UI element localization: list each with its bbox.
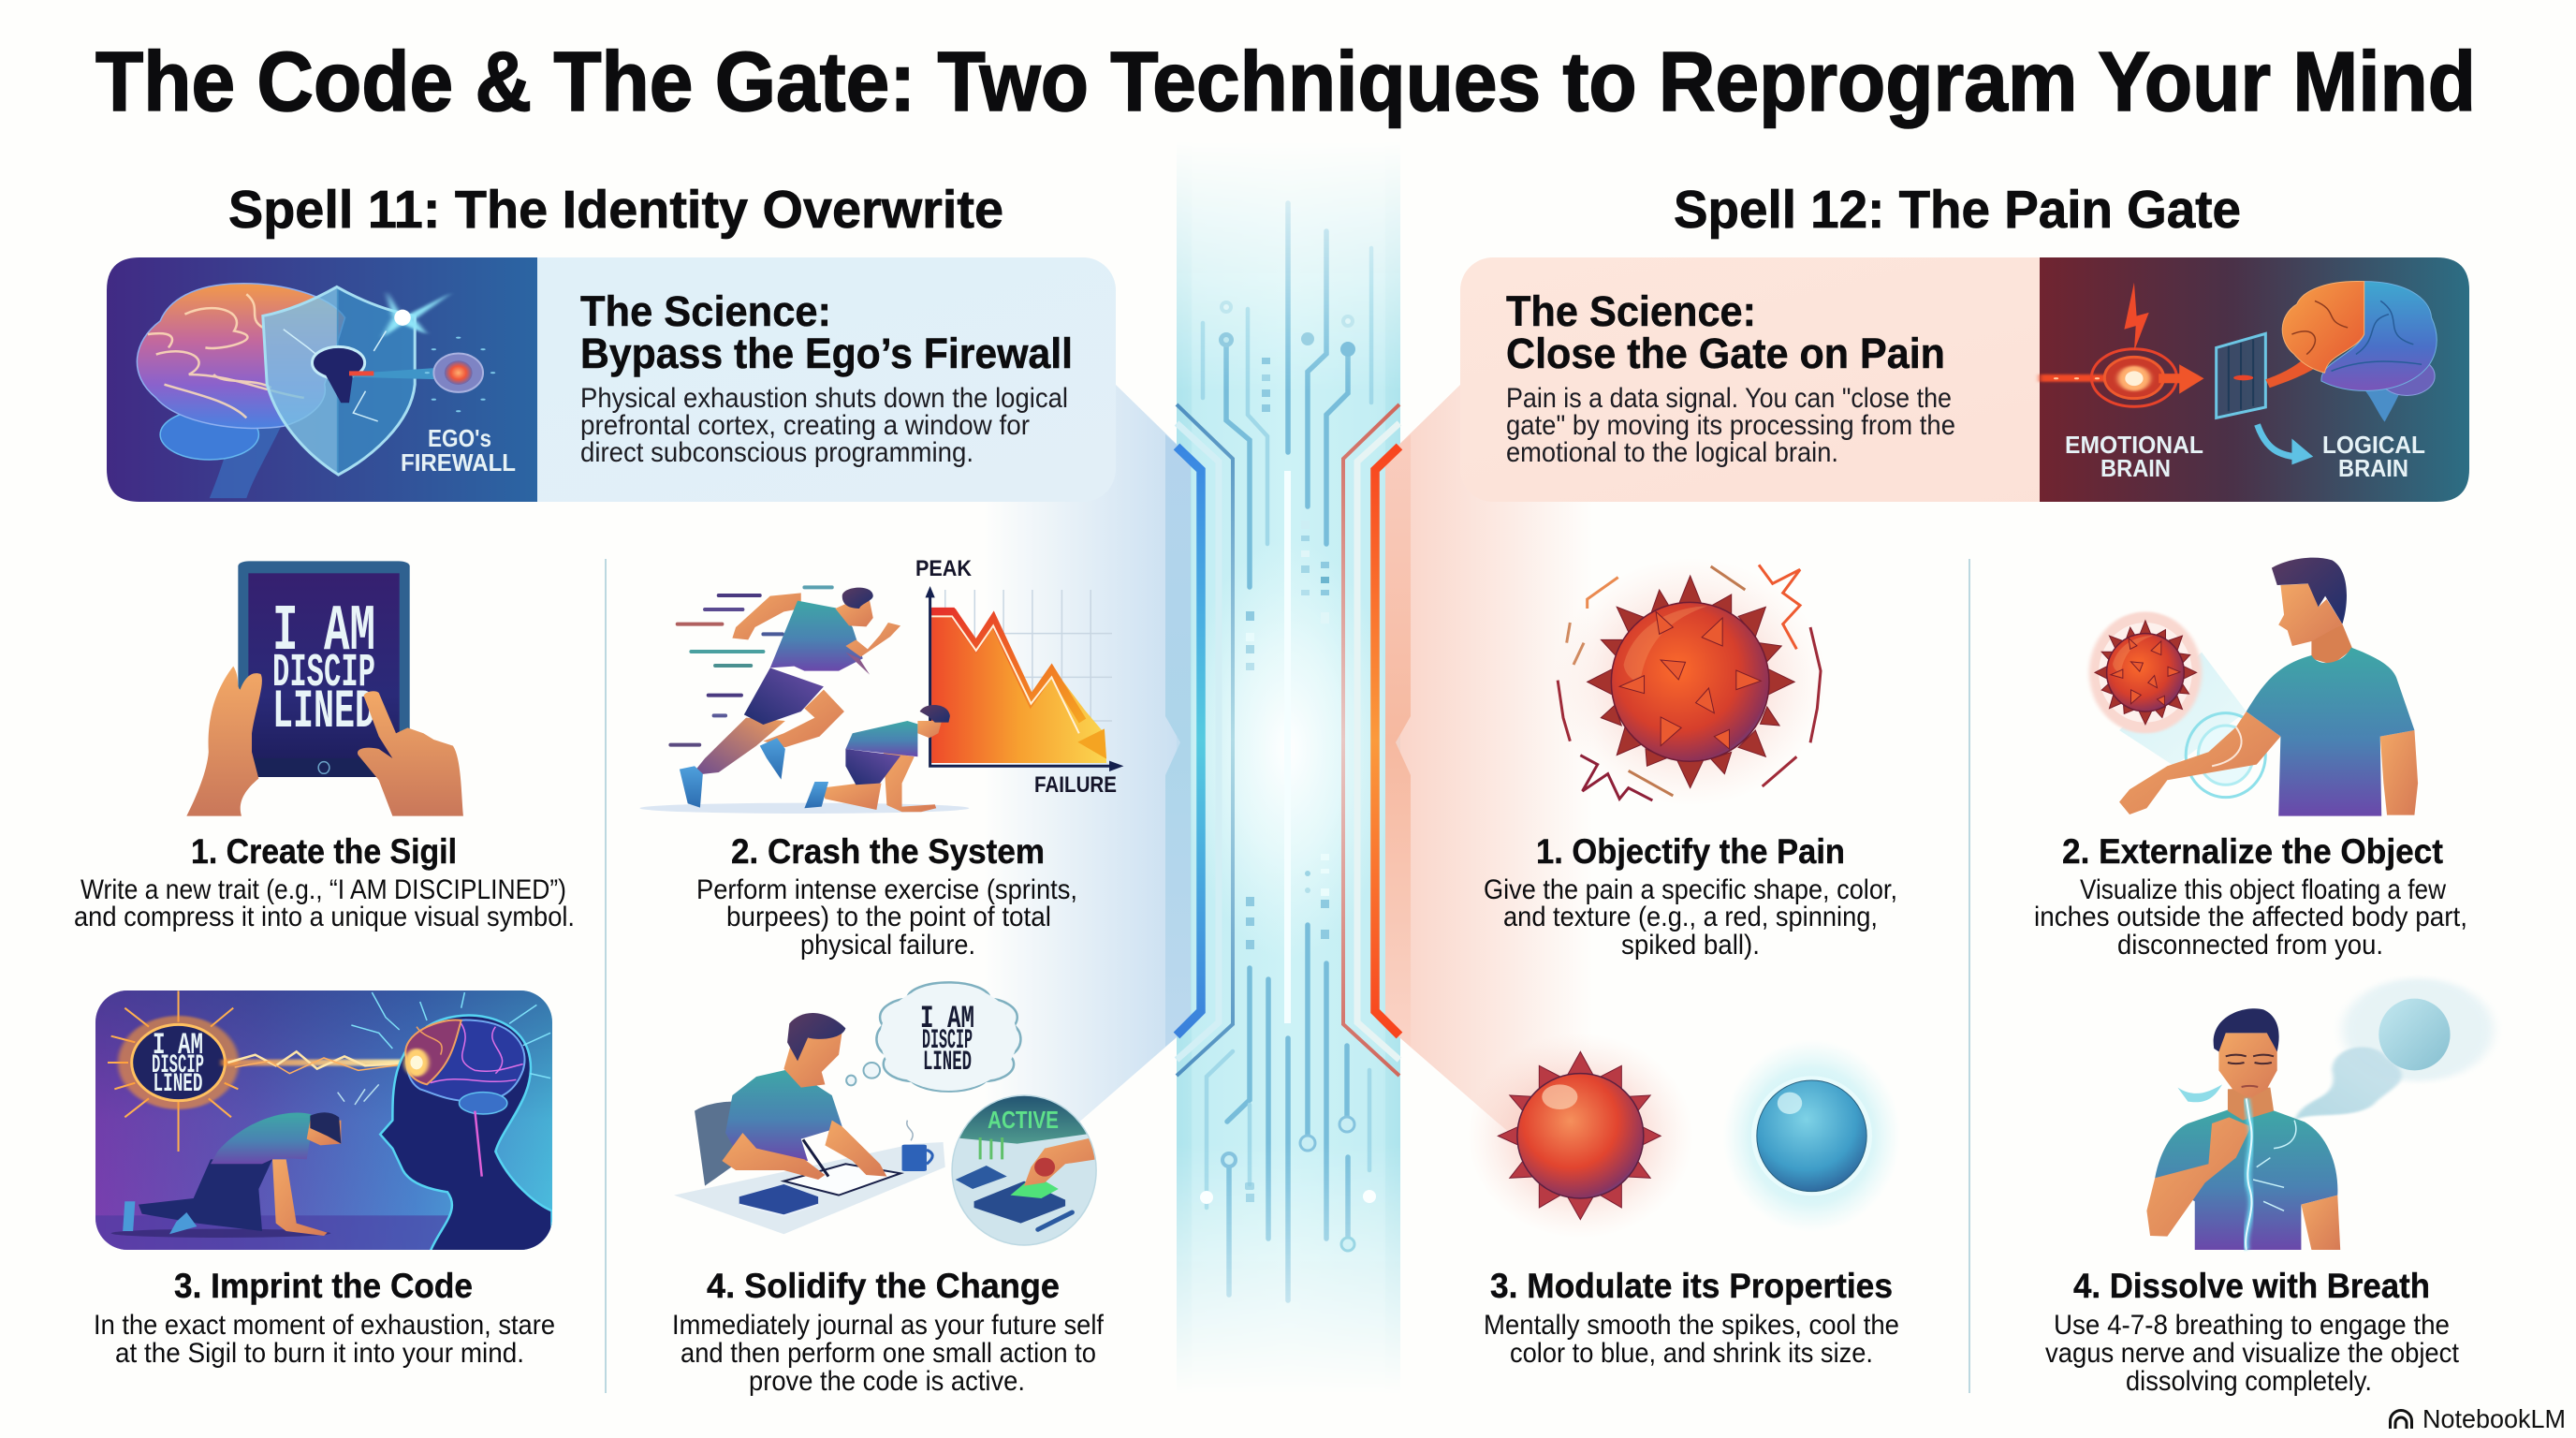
step text: prove the code is active. xyxy=(749,1366,1025,1397)
illustration: spiked pain ball xyxy=(1553,557,1827,807)
divider left xyxy=(605,559,607,1393)
step text xyxy=(696,874,1077,961)
step text: Mentally smooth the spikes, cool the xyxy=(1484,1310,1899,1341)
illustration: smooth blue orb xyxy=(1722,1039,1901,1233)
step: externalize the object xyxy=(2034,558,2467,961)
science body left: prefrontal cortex, creating a window for xyxy=(580,410,1030,441)
notebooklm watermark: NotebookLM xyxy=(2422,1404,2566,1433)
science body right: Pain is a data signal. You can "close the xyxy=(1506,383,1952,414)
science heading left xyxy=(580,287,1073,377)
step text: physical failure. xyxy=(800,930,975,961)
illustration: sigil burning into mind: DISCIP xyxy=(152,1051,204,1080)
illustration: man projecting object outside arm xyxy=(2089,558,2418,816)
illustration: journaling and active habit xyxy=(674,982,1096,1245)
chart label: peak: PEAK xyxy=(915,556,973,581)
step text: vagus nerve and visualize the object xyxy=(2045,1338,2460,1369)
illustration: tablet and hands xyxy=(186,561,463,816)
central circuit column xyxy=(1177,140,1400,1395)
step text: dissolving completely. xyxy=(2126,1366,2372,1397)
step text: at the Sigil to burn it into your mind. xyxy=(115,1338,524,1369)
image: emotional to logical brain xyxy=(2040,257,2469,502)
step text xyxy=(94,1310,555,1369)
label: logical brain xyxy=(2322,431,2425,482)
illustration: runner and collapsed man xyxy=(639,586,1123,814)
step text: and texture (e.g., a red, spinning, xyxy=(1503,902,1878,932)
label: ego's firewall xyxy=(401,424,516,477)
step text xyxy=(1484,874,1897,961)
illustration: journaling and active habit: I AM xyxy=(920,1002,974,1037)
step text: In the exact moment of exhaustion, stare xyxy=(94,1310,555,1341)
heading: spell 11: Spell 11: The Identity Overwrite xyxy=(228,180,1003,240)
step text: burpees) to the point of total xyxy=(726,902,1051,932)
step text xyxy=(672,1310,1105,1397)
step title: 1. Objectify the Pain xyxy=(1536,832,1845,871)
divider right xyxy=(1969,559,1970,1393)
step: create the sigil xyxy=(74,561,575,932)
step: modulate its properties xyxy=(1467,1033,1901,1369)
step title: 4. Solidify the Change xyxy=(707,1267,1060,1305)
science body left: Physical exhaustion shuts down the logical xyxy=(580,383,1068,414)
heading: spell 12: Spell 12: The Pain Gate xyxy=(1674,180,2241,240)
science heading right xyxy=(1506,287,1945,377)
science body left: direct subconscious programming. xyxy=(580,437,973,468)
label: emotional brain: BRAIN xyxy=(2100,454,2171,482)
title: The Code & The Gate: Two Techniques to Reprogram Your Mind xyxy=(95,36,2476,129)
step: solidify the change xyxy=(672,982,1105,1397)
red connector wedge xyxy=(1343,383,1593,1203)
step text xyxy=(1484,1310,1899,1369)
step title: 3. Modulate its Properties xyxy=(1490,1267,1893,1305)
science body right: gate" by moving its processing from the xyxy=(1506,410,1955,441)
science body right: emotional to the logical brain. xyxy=(1506,437,1838,468)
label: emotional brain: EMOTIONAL xyxy=(2065,431,2203,459)
illustration: man breathing and dissolving orb xyxy=(2146,978,2494,1250)
step text: Write a new trait (e.g., “I AM DISCIPLINED”) xyxy=(80,874,566,905)
step title: 2. Externalize the Object xyxy=(2062,832,2443,871)
step: objectify the pain xyxy=(1484,557,1897,961)
step title: 4. Dissolve with Breath xyxy=(2073,1267,2430,1305)
step text: and compress it into a unique visual symbol. xyxy=(74,902,575,932)
step text: Give the pain a specific shape, color, xyxy=(1484,874,1897,905)
step text: color to blue, and shrink its size. xyxy=(1510,1338,1873,1369)
panel: science right xyxy=(1460,257,2469,502)
illustration: sigil burning into mind: I AM xyxy=(153,1028,203,1063)
chart label: failure: FAILURE xyxy=(1034,772,1117,798)
label: ego's firewall: FIREWALL xyxy=(401,448,516,477)
step text xyxy=(2045,1310,2460,1397)
label: logical brain: LOGICAL xyxy=(2322,431,2425,459)
illustration: sigil burning into mind xyxy=(95,990,552,1252)
label: ego's firewall: EGO's xyxy=(428,424,491,452)
step text: disconnected from you. xyxy=(2117,930,2383,961)
step title: 1. Create the Sigil xyxy=(191,832,457,871)
illustration: journaling and active habit: LINED xyxy=(923,1047,972,1078)
science heading right: Close the Gate on Pain xyxy=(1506,330,1945,377)
step: dissolve with breath xyxy=(2045,978,2494,1397)
step text: Use 4-7-8 breathing to engage the xyxy=(2054,1310,2450,1341)
science heading left: Bypass the Ego’s Firewall xyxy=(580,330,1073,377)
label: logical brain: BRAIN xyxy=(2338,454,2408,482)
image: ego's firewall xyxy=(107,257,537,502)
illustration: journaling and active habit: DISCIP xyxy=(922,1025,973,1057)
science heading left: The Science: xyxy=(580,287,831,335)
science heading right: The Science: xyxy=(1506,287,1756,335)
science body left xyxy=(580,383,1068,468)
step text: Visualize this object floating a few xyxy=(2080,874,2446,905)
step text: and then perform one small action to xyxy=(681,1338,1096,1369)
step text: spiked ball). xyxy=(1621,930,1760,961)
step: imprint the code xyxy=(94,990,555,1369)
illustration: journaling and active habit: ACTIVE xyxy=(988,1106,1059,1134)
illustration: tablet and hands: I AM xyxy=(272,595,375,669)
step: crash the system xyxy=(639,556,1123,961)
illustration: red spiked ball xyxy=(1467,1033,1693,1239)
step text: inches outside the affected body part, xyxy=(2034,902,2467,932)
panel: science left xyxy=(107,257,1116,502)
step text: Immediately journal as your future self xyxy=(672,1310,1105,1341)
step text xyxy=(2034,874,2467,961)
illustration: tablet and hands: LINED xyxy=(272,682,375,743)
label: emotional brain xyxy=(2065,431,2203,482)
science body right xyxy=(1506,383,1955,468)
step text: Perform intense exercise (sprints, xyxy=(696,874,1077,905)
step title: 2. Crash the System xyxy=(731,832,1045,871)
step title: 3. Imprint the Code xyxy=(174,1267,473,1305)
blue connector wedge xyxy=(983,383,1233,1203)
illustration: sigil burning into mind: LINED xyxy=(154,1070,202,1099)
illustration: tablet and hands: DISCIP xyxy=(272,647,375,700)
step text xyxy=(74,874,575,932)
